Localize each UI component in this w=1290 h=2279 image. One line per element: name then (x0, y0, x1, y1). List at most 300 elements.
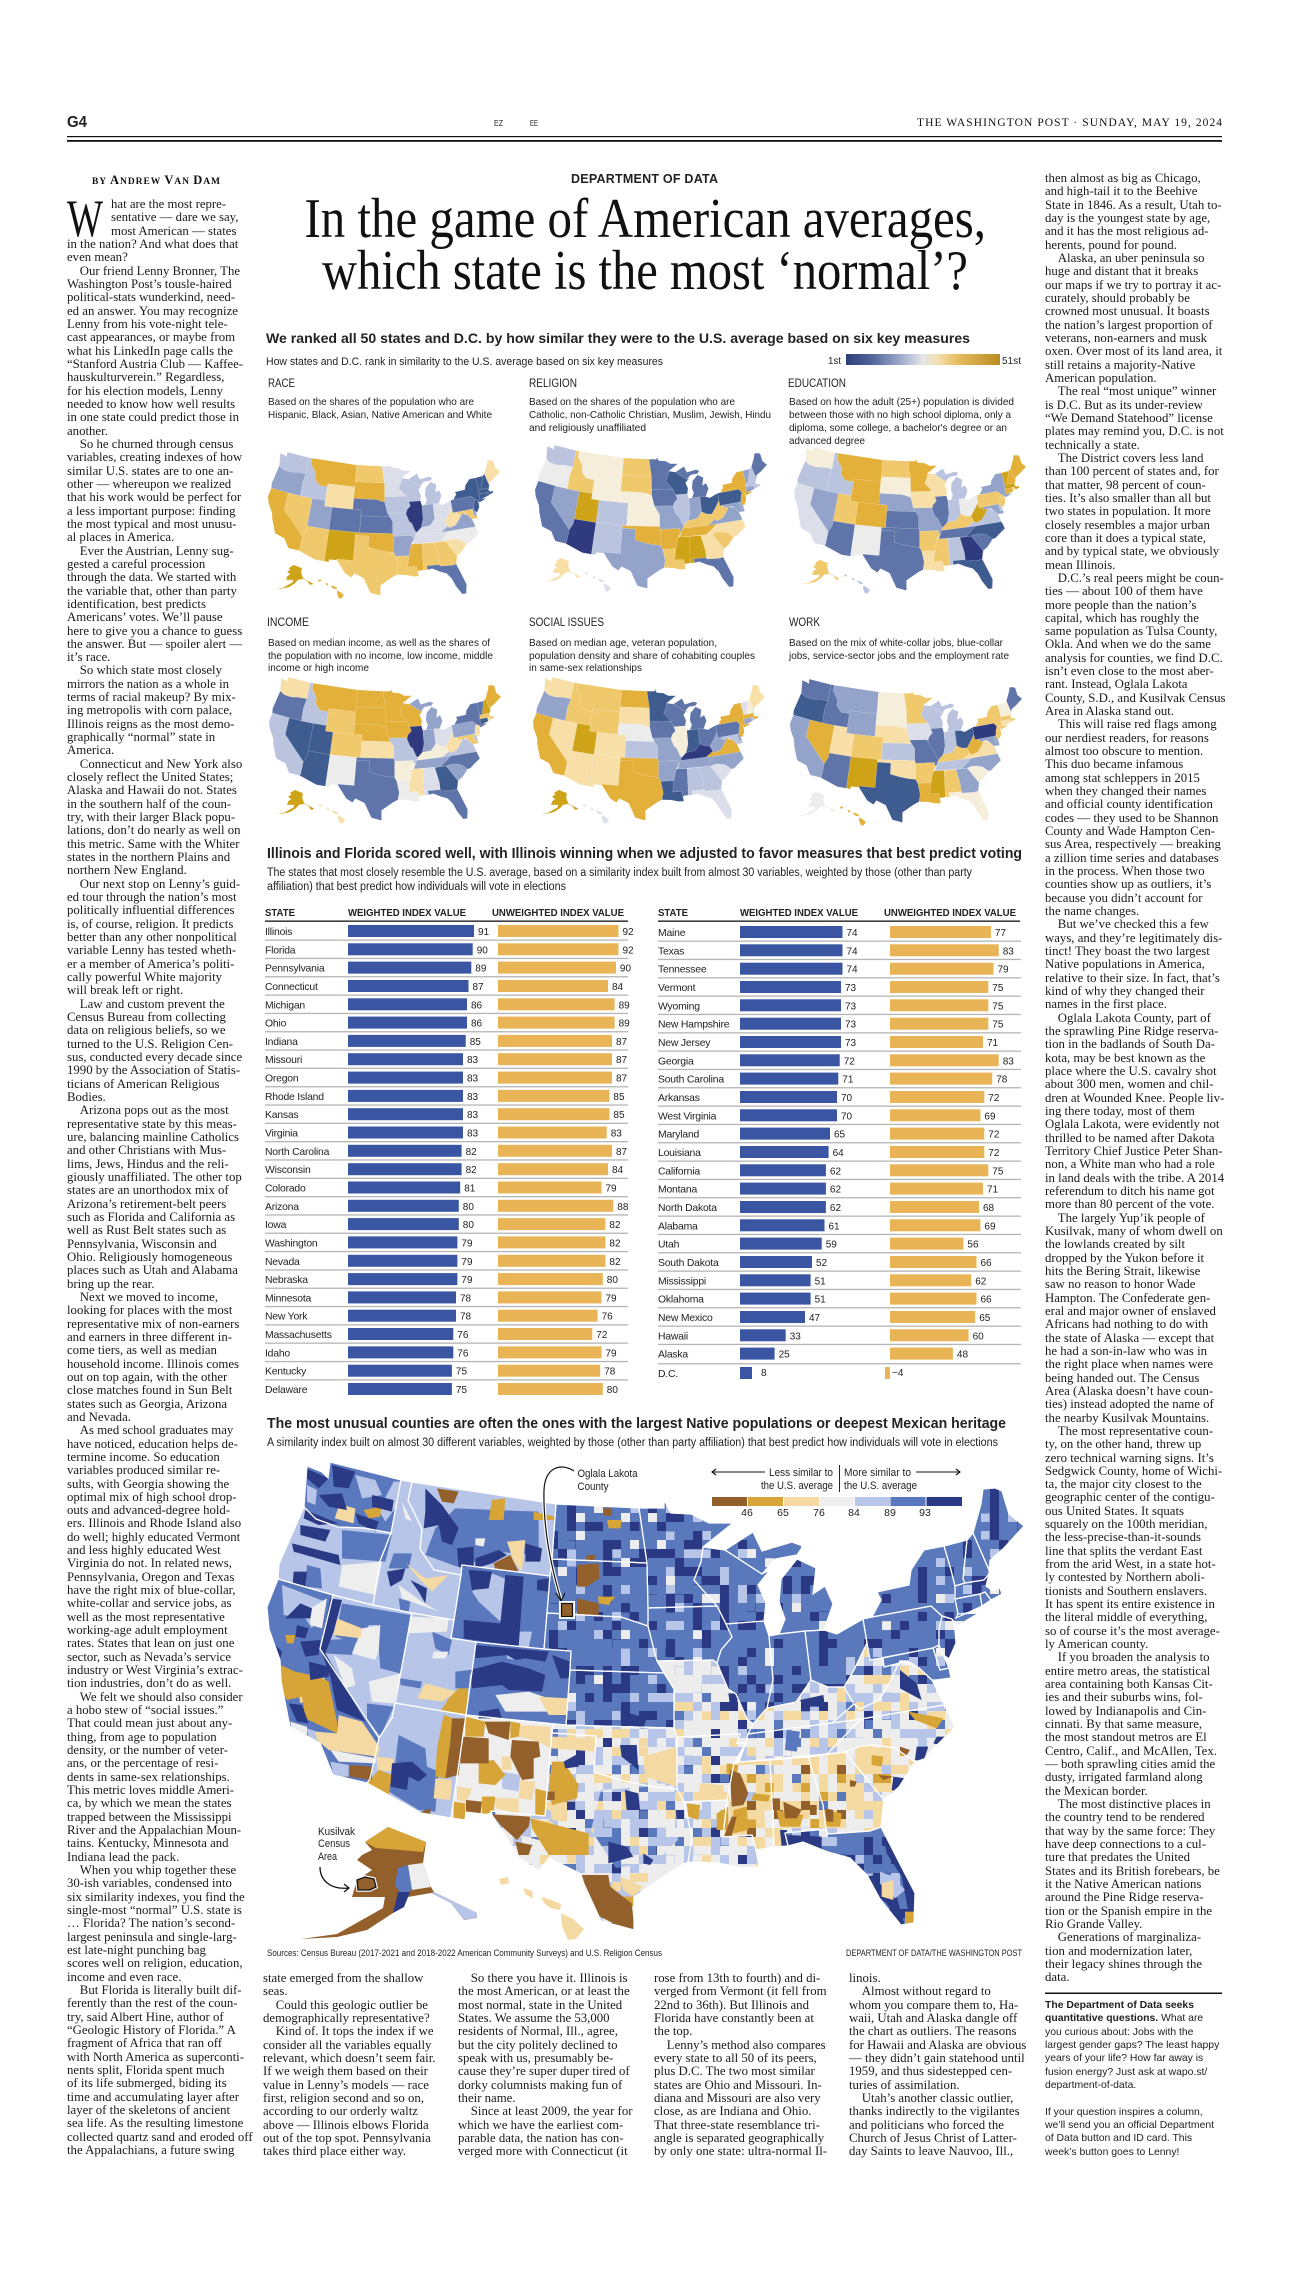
row: Kansas: 85 (613, 1110, 625, 1121)
panel description: income (268, 637, 493, 674)
row: Nebraska: 79 (461, 1275, 473, 1286)
row: New York: 78 (460, 1312, 472, 1323)
row: Washington: Washington (265, 1238, 318, 1249)
map legend: More similar to (844, 1467, 911, 1479)
row: Washington (265, 1236, 628, 1252)
row: South Carolina: 78 (996, 1075, 1008, 1086)
row: Rhode Island: 83 (467, 1092, 479, 1103)
panel description: education: diploma, some college, a bachelor's degree or an (789, 422, 1007, 434)
bar table: states 27 to 51 (658, 907, 1021, 1380)
panel: religion map (529, 378, 771, 592)
section subheading: index ranking (267, 867, 972, 893)
row: Alabama: Alabama (658, 1221, 698, 1232)
row: Arkansas (658, 1091, 1021, 1107)
row: Illinois (265, 925, 634, 941)
row: Oklahoma: Oklahoma (658, 1295, 704, 1306)
row: Michigan (265, 998, 630, 1014)
article right column: then almost as big as Chicago, and high-tail it to the Beehive State in 1846. As a result, Utah to- day is the youngest state by age, and it has the most religious ad- herents, pound for pound. Alaska, an uber peninsula so huge and distant that it breaks our maps if we try to portray it ac- curately, should probably be crowned most unusual. It boasts the nation’s largest proportion of veterans, non-earners and musk oxen. Over most of its land area, it still retains a majority-Native American population. The real “most unique” winner is D.C. But as its under-review “We Demand Statehood” license plates may remind you, D.C. is not technically a state. The District covers less land than 100 percent of states and, for that matter, 98 percent of coun- ties. It’s also smaller than all but two states in population. It more closely resembles a major urban core than it does a typical state, and by typical state, we obviously mean Illinois. D.C.’s real peers might be coun- ties — about 100 of them have more people than the nation’s capital, which has roughly the same population as Tulsa County, Okla. And when we do the same analysis for counties, we find D.C. isn’t even close to the most aber- rant. Instead, Oglala Lakota County, S.D., and Kusilvak Census Area in Alaska stand out. This will raise red flags among our nerdiest readers, for reasons almost too obscure to mention. This duo became infamous among stat schleppers in 2015 when they changed their names and official county identification codes — they used to be Shannon County and Wade Hampton Cen- sus Area, respectively — breaking a zillion time series and databases in the process. When those two counties show up as outliers, it’s because you didn’t account for the name changes. But we’ve checked this a few ways, and they’re legitimately dis- tinct! They boast the two largest Native populations in America, relative to their size. In fact, that’s kind of why they changed their names in the first place. Oglala Lakota County, part of the sprawling Pine Ridge reserva- tion in the badlands of South Da- kota, may be best known as the place where the U.S. cavalry shot about 300 men, women and chil- dren at Wounded Knee. People liv- ing there today, most of them Oglala Lakota, were evidently not thrilled to be named after Dakota Territory Chief Justice Peter Shan- non, a White man who had a role in land deals with the tribe. A 2014 referendum to ditch his name got more than 80 percent of the vote. The largely Yup’ik people of Kusilvak, many of whom dwell on the lowlands created by silt dropped by the Yukon before it hits the Bering Strait, likewise saw no reason to honor Wade Hampton. The Confederate gen- eral and major owner of enslaved Africans had nothing to do with the state of Alaska — except that he had a son-in-law who was in the right place when names were being handed out. The Census Area (Alaska doesn’t have coun- ties) instead adopted the name of the nearby Kusilvak Mountains. The most representative coun- ty, on the other hand, threw up zero technical warning signs. It’s Sedgwick County, home of Wichi- ta, the major city closest to the geographic center of the contigu- ous United States. It squats squarely on the 100th meridian, the less-precise-than-it-sounds line that splits the verdant East from the arid West, in a state hot- ly contested by Northern aboli- tionists and Southern enslavers. It has spent its entire existence in the literal middle of everything, so of course it’s the most average- ly American county. If you broaden the analysis to entire metro areas, the statistical area containing both Kansas Cit- ies and their suburbs wins, fol- lowed by Indianapolis and Cin- cinnati. By that same measure, the most standout metros are El Centro, Calif., and McAllen, Tex. — both sprawling cities amid the dusty, irrigated farmland along the Mexican border. The most distinctive places in the country tend to be rendered that way by the same force: They have deep connections to a (1045, 171, 1225, 1984)
row: Alaska: Alaska (658, 1350, 688, 1361)
panel description: education: between those with no high school diploma, only a (789, 409, 1011, 421)
map legend (712, 1465, 962, 1519)
row: Delaware (265, 1383, 618, 1396)
row: Ohio: 86 (471, 1019, 483, 1030)
row: D.C.: −4 (892, 1368, 904, 1379)
panel description: work: Based on the mix of white-collar jobs, blue-collar (789, 637, 1003, 649)
rank legend: 51st (1002, 355, 1021, 367)
panel description: race: Based on the shares of the population who are (268, 396, 474, 408)
row: Idaho: 79 (606, 1348, 617, 1359)
row: Delaware: Delaware (265, 1385, 308, 1396)
row: North Dakota: 68 (983, 1203, 995, 1214)
row: Missouri: Missouri (265, 1055, 302, 1066)
map legend: 46 (741, 1507, 753, 1519)
row: Arkansas: Arkansas (658, 1093, 700, 1104)
row: Massachusetts: Massachusetts (265, 1330, 332, 1341)
section subheading: county map: A similarity index built on almost 30 different variables, weighted by those (other than party affiliation) that best predict how individuals will vote in elections (267, 1437, 998, 1449)
large western counties (272, 1465, 622, 1855)
row: Hawaii: Hawaii (658, 1331, 688, 1342)
row: Nevada (265, 1255, 628, 1271)
row: Tennessee: 79 (998, 965, 1009, 976)
row: Louisiana: 72 (988, 1148, 1000, 1159)
row: Kentucky: 78 (604, 1367, 616, 1378)
row: California (658, 1164, 1021, 1180)
row: D.C.: D.C. (658, 1369, 678, 1380)
panel description: social issues: Based on median age, veteran population, (529, 637, 717, 649)
choropleth: work (790, 679, 1022, 826)
row: Oklahoma (658, 1293, 1021, 1308)
row: North Carolina (265, 1145, 628, 1161)
row: Kansas (265, 1108, 628, 1124)
row: Missouri: 87 (616, 1055, 628, 1066)
panel description: religion: and religiously unaffiliated (529, 422, 646, 434)
row: Minnesota: Minnesota (265, 1293, 312, 1304)
table header: right (658, 907, 1020, 922)
edition marks: EE (530, 119, 538, 128)
edition marks: EZ (494, 119, 503, 128)
dateline: THE WASHINGTON POST · SUNDAY, MAY 19, 2024 (917, 117, 1222, 129)
callout: Kusilvak Census Area: Census (318, 1838, 350, 1850)
article column 1 with drop cap: hat are the most repre- sentative — dare we say, most American — states (111, 197, 238, 238)
row: Michigan: Michigan (265, 1000, 305, 1011)
county mosaic: middle band (492, 1645, 954, 1924)
row: Michigan: 86 (471, 1000, 483, 1011)
section heading: six measures: We ranked all 50 states and D.C. by how similar they were to the U.S. average based on six key measures (266, 330, 970, 346)
row: Alaska: 25 (779, 1350, 790, 1361)
row: Indiana (265, 1035, 628, 1051)
row: Virginia (265, 1126, 628, 1142)
article bottom column C: rose from 13th to fourth) and di- verged from Vermont (it fell from 22nd to 36th). But Illinois and Florida have constantly been at the top. Lenny’s method also compares every state to all 50 of its peers, plus D.C. The two most similar states are Ohio and Missouri. In- diana and Missouri are also very close, as are Indiana and Ohio. That three-state resemblance tri- angle is separated geographically by only one state: ultra-normal Il- (654, 1971, 827, 2158)
row: Massachusetts: 72 (596, 1330, 608, 1341)
panel heading: income: INCOME (267, 617, 309, 629)
panel description: race (268, 396, 492, 421)
row: Illinois: 91 (478, 927, 490, 938)
row: Alabama: 61 (828, 1221, 840, 1232)
row: California: California (658, 1166, 700, 1177)
row: Maine: Maine (658, 928, 686, 939)
state borders (267, 1462, 1024, 1930)
panel: work map (788, 617, 1022, 826)
panel description: education: Based on how the adult (25+) population is divided (789, 396, 1014, 408)
row: Utah (658, 1238, 1021, 1253)
row: Mississippi: 62 (975, 1276, 987, 1287)
row: Georgia (658, 1054, 1021, 1070)
row: Louisiana (658, 1146, 1021, 1162)
row: Virginia: 83 (611, 1128, 622, 1140)
row: Florida: 90 (477, 945, 488, 956)
row: New Mexico (658, 1311, 1021, 1327)
map legend: the U.S. average (844, 1480, 917, 1492)
row: Georgia: 72 (844, 1056, 855, 1067)
row: Oklahoma: 66 (980, 1295, 992, 1306)
row: Wisconsin: 82 (466, 1165, 477, 1176)
page number: G4 (67, 114, 87, 131)
row: Pennsylvania: 89 (475, 964, 487, 975)
panel description: social issues: in same-sex relationships (529, 662, 642, 674)
row: Kentucky (265, 1365, 628, 1380)
row: Washington: 82 (609, 1238, 621, 1249)
row: Maryland: Maryland (658, 1130, 700, 1141)
table header: left: UNWEIGHTED INDEX VALUE (492, 907, 624, 919)
section heading: index ranking: Illinois and Florida scored well, with Illinois winning when we adjusted to favor measures that best predict voting (267, 845, 1022, 862)
row: Arkansas: 70 (841, 1093, 853, 1104)
table header: right: STATE (658, 907, 688, 919)
row: Hawaii: 33 (790, 1331, 801, 1342)
row: Illinois: Illinois (265, 927, 292, 938)
row: Georgia: 83 (1003, 1056, 1014, 1067)
choropleth: social issues (533, 677, 765, 824)
title (304, 188, 986, 302)
divider rule above department box (1045, 1992, 1222, 1994)
row: New Mexico: New Mexico (658, 1313, 713, 1324)
row: South Dakota (658, 1256, 1021, 1272)
row: Indiana: 85 (470, 1037, 481, 1048)
county mosaic: central Texas (591, 1785, 678, 1868)
row: Texas (658, 944, 1021, 960)
row: Kansas: Kansas (265, 1110, 298, 1121)
panel heading: social issues: SOCIAL ISSUES (529, 617, 604, 629)
row: Wyoming: 73 (845, 1001, 857, 1012)
row: Florida: Florida (265, 945, 296, 956)
article column 1 with drop cap: W (67, 190, 103, 248)
panel description: religion (529, 396, 771, 434)
row: South Carolina (658, 1073, 1021, 1088)
section subheading: index ranking: affiliation) that best predict how individuals will vote in elections (267, 881, 566, 893)
row: New York (265, 1310, 628, 1326)
source note: Sources: Census Bureau (2017-2021 and 2018-2022 American Community Surveys) and U.S. Religion Census (267, 1948, 662, 1959)
row: North Carolina: 82 (466, 1147, 477, 1158)
rank legend: 1st (828, 355, 841, 367)
panel description: income: the population with no income, low income, middle (268, 650, 493, 662)
row: New Jersey: 71 (987, 1038, 999, 1049)
row: Montana: 71 (987, 1185, 999, 1196)
panel description: religion: Based on the shares of the population who are (529, 396, 735, 408)
row: New Mexico: 47 (809, 1313, 821, 1324)
row: Colorado: 79 (606, 1184, 617, 1194)
row: Maine: 77 (995, 928, 1006, 939)
row: North Carolina: 87 (616, 1147, 628, 1158)
row: Montana: Montana (658, 1185, 697, 1196)
row: Arkansas: 72 (988, 1093, 1000, 1104)
map legend: Less similar to (769, 1467, 833, 1479)
row: Vermont: Vermont (658, 983, 696, 994)
panel: race map (268, 378, 500, 599)
panel description: work (788, 637, 1009, 662)
edition marks (494, 119, 538, 128)
row: Massachusetts (265, 1328, 628, 1344)
row: Nebraska: Nebraska (265, 1275, 308, 1286)
panel: social issues map (529, 617, 765, 824)
panel description: religion: Catholic, non-Catholic Christian, Muslim, Jewish, Hindu (529, 409, 771, 421)
row: Arizona: Arizona (265, 1202, 299, 1213)
row: Connecticut (265, 980, 628, 996)
map legend: 65 (777, 1507, 789, 1519)
row: New Jersey: New Jersey (658, 1038, 711, 1049)
row: Ohio: Ohio (265, 1019, 287, 1030)
row: California: 75 (992, 1166, 1004, 1177)
table header: left: WEIGHTED INDEX VALUE (348, 907, 466, 919)
article column 1 with drop cap: in the nation? And what does that even mean? Our friend Lenny Bronner, The Washington Post’s tousle-haired political-stats wunderkind, need- ed an answer. You may recognize Lenny from his vote-night tele- cast appearances, or maybe from what his LinkedIn page calls the “Stanford Austria Club — Kaffee- hauskulturverein.” Regardless, for his election models, Lenny needed to know how well results in one state could predict those in another. So he churned through census variables, creating indexes of how similar U.S. states are to one an- other — whereupon we realized that his work would be perfect for a less important purpose: finding the most typical and most unusu- al places in America. Ever the Austrian, Lenny sug- gested a careful procession through the data. We started with the variable that, other than party identification, best predicts Americans’ votes. We’ll pause here to give you a chance to guess the answer. But — spoiler alert — it’s race. So which state most closely mirrors the nation as a whole in terms of racial makeup? By mix- ing metropolis with corn palace, Illinois reigns as the most demo- graphically “normal” state in America. Connecticut and New York also closely reflect the United States; Alaska and Hawaii do not. States in the southern half of the coun- try, with their larger Black popu- lations, don’t do nearly as well on this metric. Same with the Whiter states in the northern Plains and northern New England. Our next stop on Lenny’s guid- ed tour through the nation’s most politically influential differences is, of course, religion. It predicts better than any other nonpolitical variable Lenny has tested wheth- er a member of America’s politi- cally powerful White majority will break left or right. Law and custom prevent the Census Bureau from collecting data on religious beliefs, so we turned to the U.S. Religion Cen- sus, conducted every decade since 1990 by the Association of Statis- ticians of American Religious Bodies. Arizona pops out as the most representative state by this meas- ure, balancing mainline Catholics and other Christians with Mus- lims, Jews, Hindus and the reli- giously unaffiliated. The other top states are an unorthodox mix of Arizona’s retirement-belt peers such as Florida and California as well as Rust Belt states such as Pennsylvania, Wisconsin and Ohio. Religiously homogeneous places such as Utah and Alabama bring up the rear. Next we moved to income, looking for places with the most representative mix of non-earners and earners in three different in- come tiers, as well as median household income. Illinois comes out on top again, with the other close matches found in Sun Belt states such as Georgia, Arizona and Nevada. As med school graduates may have noticed, education helps de- termine income. So education variables produced similar re- sults, with Georgia showing the optimal mix of high school drop- outs and advanced-degree hold- ers. Illinois and Rhode Island also do well; highly educated Vermont and less highly educated West Virginia do not. In related news, Pennsylvania, Oregon and Texas have the right mix of blue-collar, white-collar and service jobs, as well as the most representative working-age adult employment rates. States that lean on just one sector, such as Nevada’s service industry or West Virginia’s extrac- tion industries, don’t do as well. We felt we should also consider a hobo stew of “social issues.” That could mean just about any- thing, from age to population density, or the number of veter- ans, or the percentage of resi- dents in same-sex relationships. This metric loves middle Ameri- ca, by which we mean the states trapped between the Mississippi River and the Appalachian Moun- tains. Kentucky, Minnesota and Indiana lead the pack. When you whip together these 30-ish variables, condensed into six similarity indexes, you find the single-most “normal” U.S. state is … Florida? The nation’s second- largest peninsula and single-larg- est late-night punching (67, 237, 253, 2157)
row: Alaska: 48 (957, 1350, 968, 1361)
row: Nebraska: 80 (607, 1275, 618, 1286)
row: Oregon: Oregon (265, 1074, 299, 1085)
row: Missouri (265, 1053, 628, 1069)
table header: right: UNWEIGHTED INDEX VALUE (884, 907, 1016, 919)
row: Nevada: 82 (609, 1257, 621, 1268)
row: Rhode Island: 85 (613, 1092, 625, 1103)
row: Oregon: 87 (616, 1074, 628, 1085)
row: Tennessee (658, 963, 1021, 978)
row: North Dakota: 62 (830, 1203, 841, 1214)
row: New Hampshire: 73 (845, 1020, 857, 1031)
row: South Carolina: South Carolina (658, 1075, 724, 1086)
panel heading: education: EDUCATION (788, 378, 846, 390)
row: Iowa (265, 1218, 628, 1234)
panel description: race: Hispanic, Black, Asian, Native American and White (268, 409, 492, 421)
row: Vermont (658, 981, 1021, 997)
row: Alabama: 69 (984, 1221, 996, 1232)
panel description: work: jobs, service-sector jobs and the employment rate (788, 650, 1009, 662)
map legend: 93 (919, 1507, 931, 1519)
section subheading: six measures: How states and D.C. rank in similarity to the U.S. average based on six key measures (266, 356, 663, 368)
row: Idaho: Idaho (265, 1348, 290, 1359)
title: In the game of American averages, (304, 188, 986, 250)
panel description: social issues: population density and share of cohabiting couples (529, 650, 755, 662)
row: Wyoming: Wyoming (658, 1001, 700, 1012)
row: Colorado: Colorado (265, 1184, 306, 1194)
row: Arizona: 80 (463, 1202, 474, 1213)
row: Texas: Texas (658, 946, 684, 957)
article bottom column D: linois. Almost without regard to whom you compare them to, Ha- waii, Utah and Alaska dangle off the chart as outliers. The reasons for Hawaii and Alaska are obvious — they didn’t gain statehood until 1959, and thus sidestepped cen- turies of assimilation. Utah’s another classic outlier, thanks indirectly to the vigilantes and politicians who forced the Church of Jesus Christ of Latter- day Saints to leave Nauvoo, Ill., (849, 1971, 1026, 2158)
row: Nevada: 79 (461, 1257, 473, 1268)
row: Rhode Island: Rhode Island (265, 1092, 324, 1103)
page header (67, 114, 1222, 142)
row: Oklahoma: 51 (815, 1295, 826, 1306)
row: Maine (658, 926, 1021, 942)
Hawaii (499, 1877, 584, 1940)
callout: Kusilvak Census Area: Kusilvak (318, 1826, 355, 1838)
row: North Carolina: North Carolina (265, 1147, 330, 1158)
row: California: 62 (830, 1166, 841, 1177)
western state bases (267, 1462, 571, 1820)
kicker: DEPARTMENT OF DATA (571, 172, 718, 186)
row: Louisiana: Louisiana (658, 1148, 701, 1159)
row: New Hampshire: 75 (992, 1020, 1004, 1031)
panel description: education: advanced degree (789, 435, 865, 447)
panel heading: religion: RELIGION (529, 378, 577, 390)
county similarity map (261, 1450, 1041, 1950)
section subheading: index ranking: The states that most closely resemble the U.S. average, based on a similarity index built from almost 30 variables, weighted by those (other than party (267, 867, 972, 879)
department of data note: The Department of Data seeks quantitative questions. What are you curious about: Jobs with the largest gender gaps? The least happy years of your life? How far away is fusion energy? Just ask at wapo.st/ department-of-data. If your question inspires a column, we’ll send you an official Department of Data button and ID card. This week’s button goes to Lenny! (1045, 2000, 1219, 2158)
row: Mississippi (658, 1274, 1021, 1290)
title: which state is the most ‘normal’? (322, 240, 968, 302)
row: Texas: 83 (1003, 946, 1014, 957)
row: Idaho (265, 1346, 628, 1362)
row: Pennsylvania: 90 (620, 964, 631, 975)
table header: right: WEIGHTED INDEX VALUE (740, 907, 858, 919)
southern outlier counties (582, 1670, 947, 1933)
choropleth: race (268, 452, 500, 599)
row: Utah: Utah (658, 1240, 680, 1251)
row: Maine: 74 (846, 928, 858, 939)
row: Louisiana: 64 (833, 1148, 844, 1159)
bar table: states 1 to 26 (265, 907, 634, 1396)
map legend: 84 (848, 1507, 860, 1519)
row: Oregon: 83 (467, 1074, 479, 1085)
row: Tennessee: 74 (846, 965, 858, 976)
row: Rhode Island (265, 1090, 628, 1106)
row: Iowa: 82 (609, 1220, 621, 1231)
panel description: income: income or high income (268, 662, 369, 674)
row: Minnesota: 78 (460, 1293, 472, 1304)
row: Maryland: 65 (834, 1130, 846, 1141)
map legend: the U.S. average (761, 1480, 833, 1492)
row: Alaska (658, 1348, 1021, 1364)
table header: left: STATE (265, 907, 295, 919)
callout: Oglala Lakota County: County (578, 1481, 609, 1493)
row: West Virginia: 69 (984, 1111, 996, 1122)
row: Indiana: 87 (616, 1037, 628, 1048)
row: Hawaii (658, 1329, 1021, 1345)
row: Mississippi: 51 (815, 1276, 826, 1287)
callout: Kusilvak Census Area (318, 1826, 376, 1892)
row: D.C. (658, 1367, 904, 1380)
row: Colorado: 81 (464, 1184, 476, 1194)
row: Massachusetts: 76 (457, 1330, 469, 1341)
row: New Jersey (658, 1036, 1021, 1052)
row: Connecticut: 87 (472, 982, 484, 993)
row: Kansas: 83 (467, 1110, 479, 1121)
row: Montana (658, 1183, 1021, 1198)
row: Ohio (265, 1017, 630, 1032)
row: South Dakota: 52 (816, 1258, 828, 1269)
callout: Oglala Lakota County (544, 1467, 638, 1619)
row: Illinois: 92 (622, 927, 634, 938)
panel heading: race: RACE (268, 378, 295, 390)
map legend: 89 (884, 1507, 896, 1519)
row: D.C.: 8 (761, 1368, 767, 1379)
row: South Carolina: 71 (842, 1075, 854, 1086)
row: Minnesota (265, 1291, 628, 1307)
row: North Dakota: North Dakota (658, 1203, 717, 1214)
row: Utah: 56 (967, 1240, 979, 1251)
row: New Jersey: 73 (845, 1038, 857, 1049)
row: Montana: 62 (830, 1185, 841, 1196)
county mosaic: north and east (544, 1488, 1024, 1924)
panel heading: work: WORK (789, 617, 820, 629)
row: Utah: 59 (826, 1240, 837, 1251)
row: Pennsylvania: Pennsylvania (265, 964, 325, 975)
row: West Virginia (658, 1109, 1021, 1125)
row: Missouri: 83 (467, 1055, 479, 1066)
choropleth: religion (535, 445, 767, 592)
panel description: social issues (529, 637, 755, 674)
county mosaic: deep south (724, 1746, 914, 1850)
row: New Mexico: 65 (979, 1313, 991, 1324)
row: Florida: 92 (622, 945, 634, 956)
row: Idaho: 76 (457, 1348, 469, 1359)
panel description: income: Based on median income, as well as the shares of (268, 637, 490, 649)
choropleth: education (794, 447, 1026, 594)
byline: BY ANDREW VAN DAM (92, 173, 220, 187)
row: Kentucky: 75 (456, 1367, 467, 1378)
article bottom column A: state emerged from the shallow seas. Could this geologic outlier be demographically representative? Kind of. It tops the index if we consider all the variables equally relevant, which doesn’t seem fair. If we weigh them based on their value in Lenny’s models — race first, religion second and so on, according to our orderly waltz above — Illinois elbows Florida out of the top spot. Pennsylvania takes third place either way. (263, 1971, 435, 2158)
row: Connecticut: 84 (612, 982, 624, 993)
panel description: education (789, 396, 1014, 447)
row: Washington: 79 (461, 1238, 473, 1249)
row: Iowa: 80 (463, 1220, 474, 1231)
row: Wisconsin: Wisconsin (265, 1165, 311, 1176)
row: Minnesota: 79 (606, 1293, 617, 1304)
row: Arizona (265, 1200, 629, 1216)
panel: education map (788, 378, 1026, 594)
section heading: county map: The most unusual counties are often the ones with the largest Native populations or deepest Mexican heritage (267, 1415, 1006, 1432)
row: West Virginia: 70 (841, 1111, 853, 1122)
row: West Virginia: West Virginia (658, 1111, 717, 1122)
row: Virginia: Virginia (265, 1128, 298, 1140)
row: Alabama (658, 1219, 1021, 1235)
choropleth: income (269, 677, 501, 824)
row: South Dakota: South Dakota (658, 1258, 719, 1269)
row: Wisconsin (265, 1163, 628, 1179)
row: Nebraska (265, 1273, 628, 1289)
row: Tennessee: Tennessee (658, 965, 707, 976)
row: Georgia: Georgia (658, 1056, 694, 1067)
row: Vermont: 75 (992, 983, 1004, 994)
row: Nevada: Nevada (265, 1257, 300, 1268)
row: Kentucky: Kentucky (265, 1367, 307, 1378)
row: Florida (265, 943, 634, 959)
row: New York: New York (265, 1312, 308, 1323)
rank legend (828, 354, 1021, 367)
row: New Hampshire (658, 1018, 1021, 1034)
row: Virginia: 83 (467, 1128, 479, 1140)
row: New York: 76 (602, 1312, 613, 1323)
row: Ohio: 89 (619, 1019, 630, 1030)
row: Arizona: 88 (617, 1202, 629, 1213)
map legend: 76 (813, 1507, 825, 1519)
Alaska (301, 1827, 477, 1939)
table header: left (265, 907, 628, 922)
row: Wyoming: 75 (992, 1001, 1004, 1012)
row: Michigan: 89 (619, 1000, 630, 1011)
row: Colorado (265, 1182, 628, 1197)
row: South Dakota: 66 (980, 1258, 992, 1269)
callout: Kusilvak Census Area: Area (318, 1851, 338, 1863)
row: Hawaii: 60 (973, 1331, 984, 1342)
row: Maryland: 72 (988, 1130, 1000, 1141)
row: Iowa: Iowa (265, 1220, 287, 1231)
